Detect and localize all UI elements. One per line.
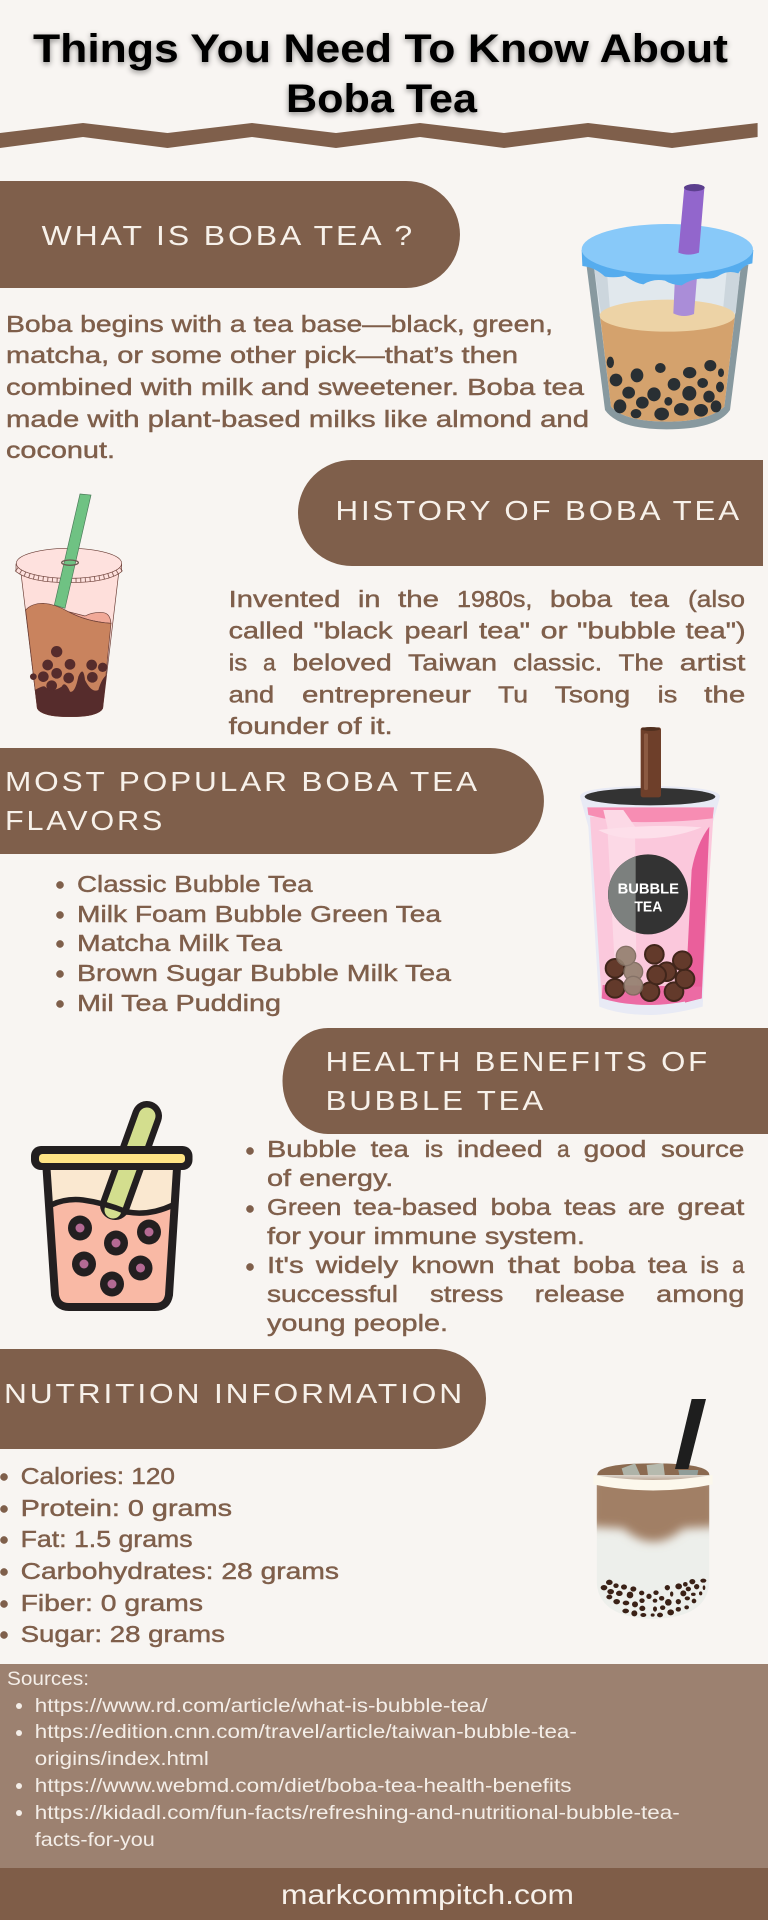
list: health benefits: for your immune system.	[267, 1223, 585, 1249]
list: health benefits: stress	[430, 1281, 503, 1307]
text block: history paragraph: called	[229, 618, 304, 644]
list: health benefits: Bubble	[267, 1136, 357, 1162]
list: nutrition facts: Fiber: 0 grams	[21, 1590, 203, 1616]
text block: history paragraph: Taiwan	[408, 650, 497, 676]
list: health benefits: successful	[267, 1281, 398, 1307]
heading pill: nutrition information: NUTRITION INFORMATION	[4, 1378, 465, 1409]
list: health benefits: boba	[573, 1252, 636, 1278]
heading pill: what is boba tea: WHAT IS BOBA TEA ?	[42, 220, 415, 251]
list: health benefits: tea	[648, 1252, 688, 1278]
list: source links: origins/index.html	[35, 1748, 209, 1770]
text block: history paragraph: tea"	[479, 618, 530, 644]
title: Things You Need To Know About	[33, 27, 728, 71]
heading pill: what is boba tea	[0, 181, 460, 288]
list: source links: https://edition.cnn.com/travel/article/taiwan-bubble-tea-	[35, 1721, 577, 1743]
list: health benefits: is	[700, 1252, 719, 1278]
list: source links	[16, 1695, 680, 1851]
text block: history paragraph: beloved	[292, 650, 392, 676]
list: nutrition facts: Calories: 120	[21, 1463, 175, 1489]
text block: history paragraph: pearl	[404, 618, 468, 644]
text block: history paragraph: (also	[688, 586, 745, 612]
heading pill: most popular boba tea flavors: FLAVORS	[5, 805, 165, 836]
text block: history paragraph: tea")	[686, 618, 746, 644]
text block: history paragraph: The	[618, 650, 664, 676]
text block: history paragraph: entrepreneur	[302, 682, 471, 708]
icon: gradient milk tea cup	[596, 1399, 710, 1619]
text block: boba description: made with plant-based milks like almond and	[6, 406, 589, 432]
list: flavors: Matcha Milk Tea	[77, 930, 283, 956]
text block: history paragraph: Tu	[498, 682, 528, 708]
heading pill: most popular boba tea flavors: MOST POPULAR BOBA TEA	[5, 766, 480, 797]
list: source links: https://www.rd.com/article/what-is-bubble-tea/	[35, 1695, 488, 1717]
list: health benefits: widely	[315, 1252, 399, 1278]
text block: history paragraph: the	[704, 682, 745, 708]
text block: boba description: matcha, or some other pick—that’s then	[6, 342, 518, 368]
footer	[0, 1868, 768, 1920]
list: health benefits: tea-based	[354, 1194, 478, 1220]
icon: pink bubble tea cup	[580, 727, 720, 1015]
list: health benefits: teas	[564, 1194, 616, 1220]
heading pill: health benefits of bubble tea	[282, 1028, 768, 1134]
text block: boba description	[6, 311, 589, 463]
text block: history paragraph: tea	[630, 586, 670, 612]
heading pill: health benefits of bubble tea: HEALTH BENEFITS OF	[326, 1046, 710, 1077]
zigzag divider	[0, 123, 758, 148]
text block: history paragraph: Tsong	[555, 682, 630, 708]
list: flavors: Brown Sugar Bubble Milk Tea	[77, 960, 452, 986]
icon: blue lid boba cup	[582, 184, 753, 429]
list: health benefits: tea	[371, 1136, 410, 1162]
title: Boba Tea	[286, 77, 478, 121]
text block: history paragraph: artist	[680, 650, 746, 676]
text block: history paragraph: is	[658, 682, 677, 708]
list: health benefits: Green	[267, 1194, 341, 1220]
panel: history of boba tea	[16, 460, 763, 739]
text block: history paragraph: is	[229, 650, 247, 676]
text block: history paragraph: the	[398, 586, 439, 612]
heading pill: health benefits of bubble tea: BUBBLE TEA	[326, 1085, 546, 1116]
list: health benefits: source	[661, 1136, 744, 1162]
list: health benefits: release	[535, 1281, 625, 1307]
list: flavors: Milk Foam Bubble Green Tea	[77, 901, 442, 927]
text block: history paragraph: in	[358, 586, 380, 612]
text block: boba description: coconut.	[6, 437, 115, 463]
list: health benefits: indeed	[457, 1136, 543, 1162]
list: nutrition facts: Fat: 1.5 grams	[21, 1526, 193, 1552]
text block: history paragraph: "black	[313, 618, 393, 644]
list: nutrition facts	[0, 1463, 339, 1647]
text block: boba description: Boba begins with a tea base—black, green,	[6, 311, 553, 337]
list: flavors: Mil Tea Pudding	[77, 990, 281, 1016]
text block: history paragraph: Invented	[229, 586, 340, 612]
list: flavors: Classic Bubble Tea	[77, 871, 314, 897]
text block: history paragraph: founder of it.	[229, 713, 393, 739]
text block: history paragraph: and	[229, 682, 274, 708]
list: health benefits: of energy.	[267, 1165, 393, 1191]
text block: history paragraph: classic.	[513, 650, 602, 676]
list: nutrition facts: Protein: 0 grams	[21, 1495, 232, 1521]
list: health benefits: great	[677, 1194, 745, 1220]
text block: history paragraph: boba	[550, 586, 613, 612]
heading pill: history of boba tea: HISTORY OF BOBA TEA	[336, 495, 742, 526]
panel: sources	[0, 1664, 768, 1868]
panel: what is boba tea	[0, 181, 753, 463]
icon: pink bubble tea cup: TEA	[634, 900, 663, 916]
heading pill: history of boba tea	[298, 460, 763, 566]
title	[33, 27, 728, 121]
list: health benefits: a	[732, 1252, 745, 1278]
heading pill: nutrition information	[0, 1349, 486, 1449]
icon: green straw boba cup	[16, 494, 122, 717]
footer: markcommpitch.com	[281, 1879, 574, 1910]
list: flavors	[56, 871, 452, 1016]
list: health benefits: known	[411, 1252, 495, 1278]
list: nutrition facts: Carbohydrates: 28 grams	[21, 1558, 339, 1584]
panel: nutrition information	[0, 1349, 717, 1647]
text block: boba description: combined with milk and sweetener. Boba tea	[6, 374, 585, 400]
list: health benefits: boba	[491, 1194, 552, 1220]
list: nutrition facts: Sugar: 28 grams	[21, 1621, 225, 1647]
icon: yellow lid boba cup	[31, 1116, 192, 1307]
text block: history paragraph: or	[541, 618, 568, 644]
heading: sources: Sources:	[7, 1668, 89, 1690]
panel: most popular flavors	[0, 727, 720, 1016]
list: health benefits: It's	[267, 1252, 304, 1278]
icon: pink bubble tea cup: BUBBLE	[618, 881, 679, 897]
heading pill: most popular boba tea flavors	[0, 748, 544, 854]
list: health benefits: are	[628, 1194, 665, 1220]
list: health benefits: a	[557, 1136, 571, 1162]
list: health benefits: that	[508, 1252, 560, 1278]
list: health benefits: young people.	[267, 1310, 448, 1336]
text block: history paragraph: "bubble	[577, 618, 676, 644]
list: source links: facts-for-you	[35, 1829, 155, 1851]
text block: history paragraph	[229, 586, 746, 739]
panel: health benefits	[31, 1028, 768, 1336]
list: source links: https://kidadl.com/fun-facts/refreshing-and-nutritional-bubble-tea-	[35, 1802, 680, 1824]
list: health benefits: is	[425, 1136, 443, 1162]
list: health benefits: good	[584, 1136, 646, 1162]
list: health benefits: among	[656, 1281, 744, 1307]
text block: history paragraph: a	[263, 650, 277, 676]
list: health benefits	[246, 1136, 745, 1336]
list: source links: https://www.webmd.com/diet/boba-tea-health-benefits	[35, 1775, 572, 1797]
text block: history paragraph: 1980s,	[457, 586, 532, 612]
